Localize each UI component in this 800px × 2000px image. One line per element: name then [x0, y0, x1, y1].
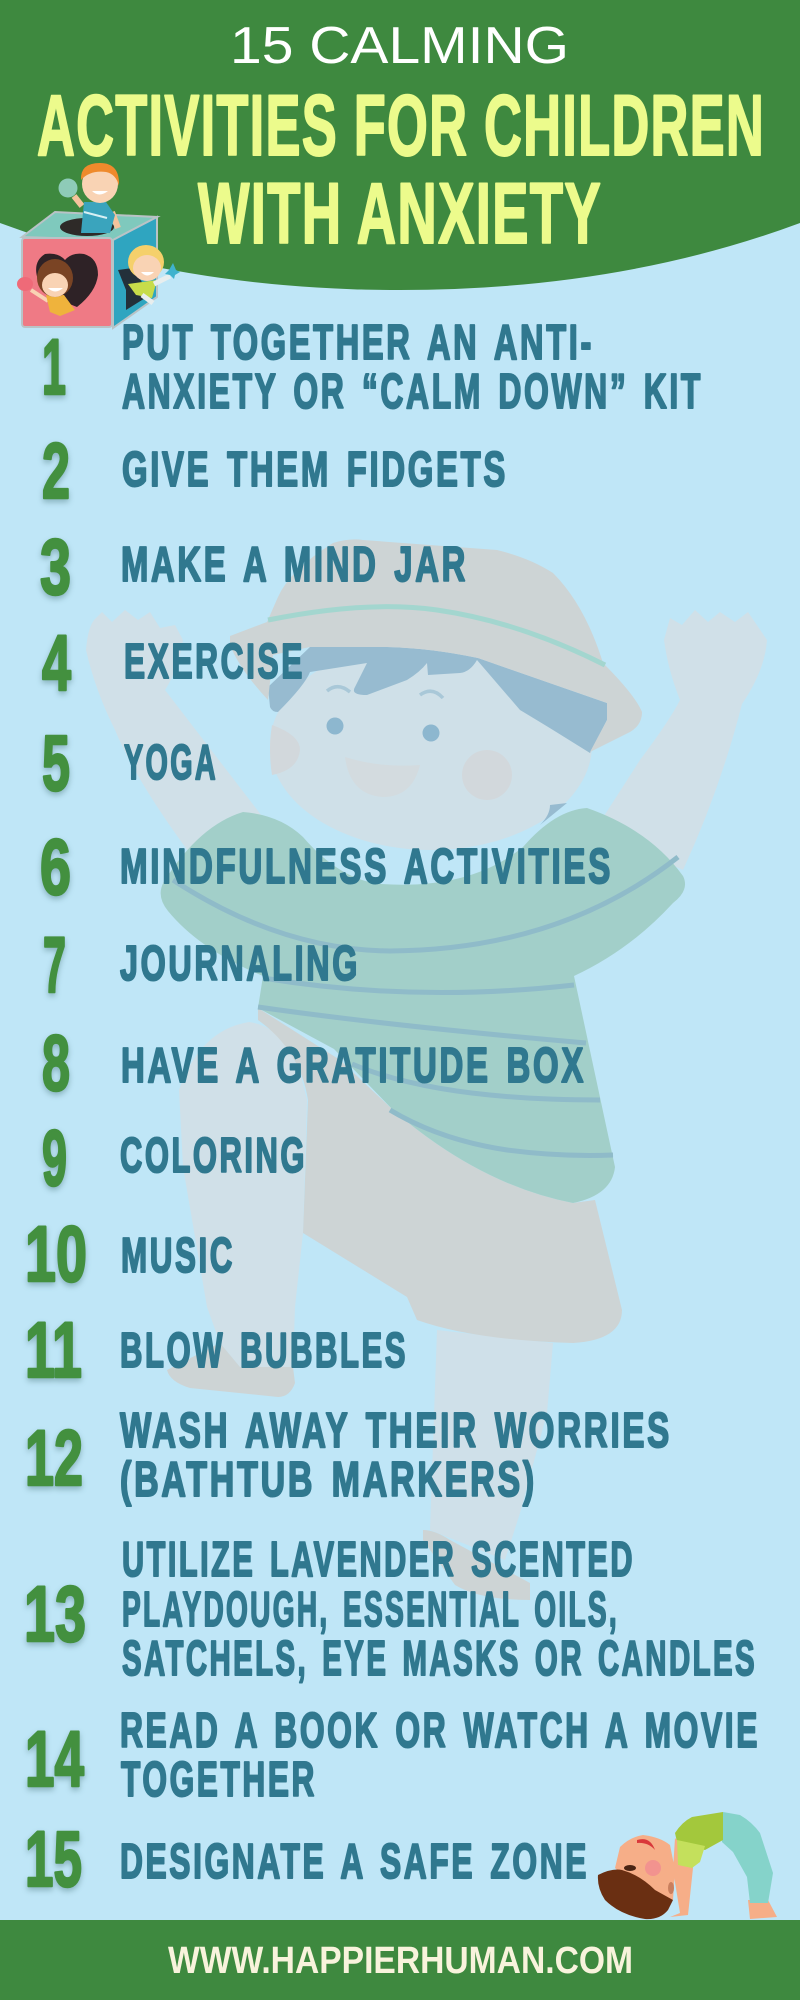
icon: toy cube with children [17, 163, 180, 328]
hair [268, 647, 607, 753]
icon: child doing yoga bridge pose [598, 1812, 777, 1919]
hair tuft at neck [540, 803, 567, 825]
dress [46, 295, 75, 316]
head [82, 165, 118, 203]
list item 11: BLOW BUBBLES [120, 1324, 408, 1378]
list item 11 [25, 1305, 408, 1394]
arms [86, 610, 767, 880]
list item 5: 5 [42, 718, 70, 807]
list item 4: EXERCISE [124, 635, 305, 689]
feet [748, 1900, 777, 1919]
text: item 14: TOGETHER [121, 1753, 317, 1807]
face [133, 255, 161, 281]
hair [128, 245, 164, 279]
list item 9 [42, 1113, 307, 1202]
list item 8: HAVE A GRATITUDE BOX [121, 1039, 586, 1093]
list item 8: 8 [42, 1018, 70, 1107]
list item 10 [25, 1209, 235, 1298]
shorts [258, 1008, 622, 1343]
stripe [84, 212, 107, 218]
title line: 15 calming: 15 CALMING [230, 17, 569, 75]
list item 7: JOURNALING [120, 937, 360, 991]
list item 4: 4 [42, 618, 71, 707]
list item 13 [24, 1533, 757, 1686]
list item 10: MUSIC [121, 1229, 235, 1283]
nose [624, 1865, 636, 1871]
title: activities for children with anxiety [37, 78, 765, 262]
heart opening [36, 254, 98, 307]
eyebrows [327, 687, 443, 698]
mouth [637, 1839, 655, 1850]
face [270, 640, 592, 850]
watermark illustration: boy in hat [86, 539, 767, 1600]
legs [722, 1812, 773, 1903]
cube front [22, 238, 112, 327]
hair [37, 259, 73, 297]
shirt [161, 808, 685, 1203]
text: item 12 [120, 1404, 672, 1507]
list item 8 [42, 1018, 586, 1107]
left leg [179, 1022, 307, 1367]
ball [58, 178, 78, 198]
smile [92, 191, 108, 194]
right foot [423, 1530, 530, 1600]
shirt stripes [173, 857, 678, 1155]
balloon heart [17, 277, 33, 291]
list item 14: 14 [25, 1714, 84, 1803]
list item 13: 13 [24, 1569, 86, 1658]
list item 6 [40, 822, 613, 911]
cheeks [270, 725, 512, 800]
text: item 1 [122, 316, 703, 419]
list item 9: COLORING [120, 1129, 307, 1183]
list item 2: GIVE THEM FIDGETS [122, 443, 508, 497]
list item 1 [42, 316, 703, 419]
header panel [0, 0, 800, 290]
list item 14 [25, 1704, 760, 1807]
text: item 13 [122, 1533, 757, 1686]
arm [31, 290, 48, 301]
arm [670, 1838, 693, 1917]
hat [230, 539, 642, 752]
list item 12 [25, 1404, 672, 1507]
list item 15: 15 [25, 1814, 82, 1903]
arm [142, 276, 170, 303]
list item 4 [42, 618, 305, 707]
text: item 12: (BATHTUB MARKERS) [120, 1453, 537, 1507]
hat band [268, 607, 605, 665]
list item 11: 11 [25, 1305, 82, 1394]
list item 3: 3 [40, 522, 71, 611]
smile [141, 272, 154, 276]
arms [74, 196, 118, 228]
list item 15 [25, 1814, 589, 1903]
face [42, 273, 68, 297]
list item 10: 10 [25, 1209, 87, 1298]
list item 2: 2 [42, 426, 70, 515]
face [615, 1835, 675, 1900]
eyes [326, 718, 440, 742]
list item 2 [42, 426, 508, 515]
list item 6: 6 [40, 822, 71, 911]
list item 3: MAKE A MIND JAR [121, 538, 468, 592]
list item 7: 7 [43, 920, 66, 1009]
right leg [430, 1330, 553, 1560]
cube right side [113, 217, 157, 328]
list item 3 [40, 522, 468, 611]
girl [17, 259, 75, 316]
list item 5: YOGA [124, 736, 218, 790]
blond child [128, 245, 180, 303]
shirt [675, 1812, 723, 1850]
mouth [345, 757, 420, 797]
torso [81, 202, 115, 233]
text: item 14 [120, 1704, 760, 1807]
left foot [167, 1343, 295, 1397]
side opening [118, 268, 150, 310]
list item 1: 1 [42, 322, 66, 411]
hair [81, 163, 119, 186]
star [165, 263, 180, 279]
ear [668, 1882, 674, 1894]
hole in cube top [60, 218, 114, 236]
boy on top of cube [58, 163, 119, 233]
sleeve [677, 1840, 705, 1868]
shirt [128, 280, 157, 298]
smile [48, 288, 63, 292]
footer url: WWW.HAPPIERHUMAN.COM [168, 1940, 633, 1982]
list item 7 [43, 920, 360, 1009]
list item 12: 12 [25, 1413, 83, 1502]
list item 5 [42, 718, 218, 807]
cheek [645, 1860, 661, 1876]
hair [598, 1870, 673, 1919]
list item 9: 9 [42, 1113, 67, 1202]
cube top [22, 212, 157, 240]
footer bar [0, 1920, 800, 2000]
